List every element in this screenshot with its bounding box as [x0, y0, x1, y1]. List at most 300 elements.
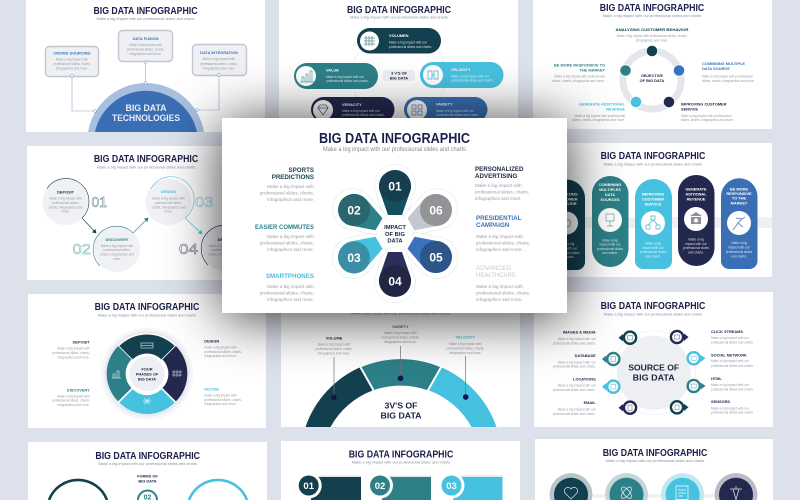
label: sensors: Make a big impact with our [711, 406, 750, 410]
panel: big data technologies [26, 0, 265, 132]
petal 03: 03 [347, 251, 361, 265]
subheading: Make a big impact with our professional slides and charts [350, 14, 448, 20]
pill: volumen: VOLUMEN [389, 33, 409, 38]
forms label [137, 474, 158, 484]
label: be more responsive: THE MARKET [579, 68, 606, 72]
pill: velocity: professional slides and charts. [451, 78, 494, 82]
callout: velocity: professional slides, charts, [447, 346, 484, 350]
label: discovery: DISCOVERY [67, 388, 90, 393]
step 03 design: more. [164, 210, 173, 214]
label: improving customer service [681, 102, 734, 122]
heading: BIG DATA INFOGRAPHIC [601, 151, 705, 162]
arch chart: 3V'S OF [384, 400, 418, 410]
step 03 design: DESIGN [161, 189, 176, 194]
pill: velocity [420, 62, 504, 88]
subheading: Make a big impact with our professional slides and charts [606, 458, 704, 463]
label: combining multiple data source: COMBINING MULTIPLE [702, 61, 745, 66]
step 04 decide: charts, infographics and [208, 252, 242, 256]
label: analyzing customer behavior: ANALYZING CUSTOMER BEHAVIOR [616, 27, 689, 32]
heading: BIG DATA INFOGRAPHIC [94, 154, 198, 165]
label: social network: professional slides and charts. [711, 364, 754, 368]
label: images and media: professional slides and charts. [553, 342, 596, 346]
subheading: Make a big impact with our professional slides and charts [98, 461, 197, 466]
label: advanced healthcare: professional slides, charts, [476, 290, 530, 296]
label: personalized advertising [475, 166, 529, 201]
pill: value: VALUE [326, 68, 339, 72]
petal 02 [332, 188, 387, 238]
label: analyzing customer behavior [616, 27, 689, 42]
heading: BIG DATA INFOGRAPHIC [347, 5, 451, 16]
petal 03 [332, 229, 387, 279]
label: html [711, 376, 754, 392]
label: sports predictions: infographics and more. [267, 197, 314, 202]
step 04 decide: 04 [179, 241, 198, 258]
pill: generate: impact with our [685, 242, 708, 246]
heading: BIG DATA INFOGRAPHIC [349, 450, 453, 461]
label: presidential campaign: professional slides, charts, [476, 240, 530, 246]
label: sensors: professional slides and charts. [711, 410, 754, 414]
label: smartphones: professional slides, charts, [260, 290, 314, 296]
step 03 design: 03 [195, 194, 214, 211]
subheading: Make a big impact with our professional slides and charts [604, 161, 702, 166]
card: data fusion: professional slides, charts, [127, 48, 164, 52]
label: smartphones: infographics and more. [267, 297, 314, 302]
pill: analyzing: Make a big [559, 242, 575, 246]
label: improving customer service: IMPROVING CUSTOMER [681, 102, 727, 106]
step 02 discovery: charts, infographics and [100, 252, 134, 256]
step 02 discovery: professional slides, [103, 248, 131, 252]
label: social network: SOCIAL NETWORK [711, 352, 747, 357]
ring: dark [49, 480, 107, 500]
pill: improving: and charts. [645, 254, 661, 258]
label: email: EMAIL [584, 400, 596, 405]
step 02 discovery: Make a big impact with [101, 244, 133, 248]
pill: generate: GENERATE [685, 187, 707, 192]
center label: 3 V'S OF [391, 70, 408, 76]
dome: TECHNOLOGIES [112, 113, 180, 123]
label: combining multiple data source [702, 61, 755, 83]
label: decide: professional slides, charts, [204, 398, 242, 402]
card: crowd sourcing: infographics and more. [56, 66, 88, 70]
pill: analyzing: ANALYZING [555, 192, 578, 197]
pill: generate: professional slides [683, 246, 710, 250]
badge 02 [138, 490, 157, 500]
callout: variety: infographics and more. [384, 340, 417, 344]
callout: volume: Make a big impact with [318, 342, 350, 346]
card: data fusion: Make a big impact with [129, 43, 162, 47]
label: advanced healthcare: ADVANCED [476, 265, 512, 272]
label: generate additional revenue: Make a big impact with professional [574, 114, 625, 118]
card: crowd sourcing: CROWD SOURCING [53, 50, 91, 56]
label: locations [553, 377, 597, 392]
label: images and media: Make a big impact with our [558, 337, 597, 341]
center band [585, 217, 772, 228]
flower chart [325, 164, 465, 303]
block 03 [438, 472, 502, 500]
label: improving customer service: slides, charts, infographics and more. [681, 118, 734, 122]
label: personalized advertising: infographics and more. [475, 196, 522, 201]
label: email: Make a big impact with our [558, 408, 597, 412]
pill: veracity: Make a big impact with our [342, 109, 381, 113]
label: generate additional revenue [572, 102, 626, 122]
pill: improving: SERVICE [644, 202, 662, 206]
petal 02: 02 [347, 203, 361, 217]
label: deposit: Make a big impact with [57, 347, 90, 351]
label: presidential campaign: CAMPAIGN [476, 222, 510, 229]
label: presidential campaign [476, 215, 530, 252]
label: click streams: professional slides and charts. [711, 340, 754, 344]
label: presidential campaign: Make a big impact with [476, 234, 523, 239]
subheading: Make a big impact with our professional slides and charts [603, 13, 701, 18]
ring chart [620, 45, 685, 109]
label: smartphones [260, 273, 314, 302]
pill: improving [635, 179, 672, 269]
card: crowd sourcing: Make a big impact with [56, 58, 88, 62]
panel: impact of big data (center slide) [222, 118, 567, 313]
pill: improving: Make a big [645, 242, 661, 246]
callout: variety: professional slides, charts, [382, 336, 419, 340]
block 03: 03 [446, 481, 457, 492]
label: social network [711, 352, 754, 368]
card: data integration: infographics and more. [203, 66, 235, 70]
step 01 deposit: 01 [92, 194, 107, 211]
label: analyzing customer behavior: Make a big impact with professional slides, charts, [617, 34, 688, 38]
connector lines [72, 62, 219, 111]
label: be more responsive: Make a big impact with professional [554, 74, 605, 78]
label: advanced healthcare: HEALTHCARE [476, 272, 516, 279]
subheading: Make a big impact with our professional slides and charts [604, 311, 702, 316]
arch chart: BIG DATA [380, 411, 422, 421]
label: html: Make a big impact with our [711, 383, 750, 387]
donut chart: BIG DATA [138, 376, 156, 381]
pill: be more responsive: RESPONSIVE [726, 191, 752, 196]
forms label: BIG DATA [138, 479, 157, 484]
label: improving customer service: Make a big impact with professional [681, 114, 732, 118]
pill: variety: Make a big impact with our [436, 109, 475, 113]
step 03 design: Make a big impact with [152, 196, 185, 200]
panel: 3V's arch [281, 292, 520, 427]
step 02 discovery: more. [113, 257, 121, 261]
pill: volumen: Make a big impact with our [389, 40, 428, 44]
pill: be more responsive: professional slides [726, 250, 753, 254]
step 01 deposit: professional slides, [52, 201, 79, 205]
card: data fusion [118, 30, 172, 62]
label: html: professional slides and charts. [711, 388, 754, 392]
label: database [553, 353, 597, 368]
subheading: Make a big impact with our professional slides and charts [96, 16, 194, 21]
step 04 decide: professional slides, [211, 248, 239, 252]
label: presidential campaign: infographics and more. [476, 247, 523, 252]
heading: BIG DATA INFOGRAPHIC [94, 6, 198, 17]
center label [383, 70, 415, 81]
card: data fusion: infographics and more. [129, 52, 162, 56]
connector band [571, 494, 736, 498]
pill: generate: ADITIONAL [685, 192, 707, 196]
label: deposit: infographics and more. [57, 356, 90, 360]
pill: veracity: professional slides and charts. [342, 113, 385, 117]
petal 06 [403, 188, 458, 238]
hub: OF BIG [385, 232, 405, 238]
callout: velocity: Make a big impact with [449, 342, 482, 346]
step 01 deposit: more. [61, 210, 70, 214]
dome [88, 83, 204, 132]
step 03 design [146, 177, 214, 234]
petal 05: 05 [429, 250, 443, 264]
connecting ring [354, 49, 444, 97]
panel: four steps process [27, 146, 222, 280]
label: click streams: Make a big impact with our [711, 336, 750, 340]
hub [378, 216, 412, 251]
pill: combining: professional slides [597, 247, 624, 251]
step 04 decide: Make a big impact with [209, 244, 241, 248]
card: crowd sourcing [46, 46, 98, 76]
pill: variety [404, 97, 488, 118]
label: decide: Make a big impact with [204, 394, 237, 398]
callout: volume: infographics and more. [318, 352, 350, 356]
panel: four phases of big data [28, 294, 266, 428]
callout: volume: professional slides, charts, [315, 347, 353, 351]
label: personalized advertising: ADVERTISING [475, 173, 517, 180]
pill: analyzing: professional slides [553, 251, 580, 255]
card: crowd sourcing: professional slides, charts, [53, 62, 91, 66]
label: analyzing customer behavior: infographics and more. [636, 38, 668, 42]
pill: combining [592, 176, 628, 267]
label: design [204, 339, 242, 358]
ring chart: OBJECTIVE [641, 73, 663, 78]
label: database: Make a big impact with our [558, 360, 597, 364]
pill: generate: Make a big [688, 238, 704, 242]
pill: value [294, 63, 378, 89]
pill: be more responsive [721, 178, 758, 269]
pill: combining: SOURCES [600, 197, 620, 202]
label: click streams: CLICK STREAMS [711, 329, 743, 334]
pill: generate: and charts. [688, 250, 704, 254]
label: be more responsive [552, 62, 606, 83]
donut chart: PHASES OF [136, 371, 159, 376]
forms label: FORMS OF [137, 474, 158, 479]
ring chart: OF BIG DATA [640, 78, 665, 83]
label: deposit: professional slides, charts, [52, 351, 90, 355]
label: design: DESIGN [204, 339, 219, 344]
label: combining multiple data source: slides, charts, infographics and more. [702, 79, 755, 83]
petal 05 [403, 229, 458, 279]
step 04 decide [179, 225, 222, 270]
source nodes [602, 330, 706, 415]
pill: analyzing: BEHAVIOR [556, 201, 577, 206]
center label: BIG DATA [390, 76, 408, 80]
petal halos [325, 164, 465, 303]
label: sports predictions: Make a big impact with [267, 184, 314, 189]
pill: combining: DATA [605, 192, 615, 197]
label: decide: DECIDE [204, 387, 219, 392]
label: design: professional slides, charts, [204, 350, 242, 354]
pill: be more responsive: and charts. [731, 254, 747, 258]
label: advanced healthcare: Make a big impact with [476, 284, 523, 289]
step 03 design: charts, infographics and [152, 206, 186, 210]
central circle: SOURCE OF [628, 363, 679, 372]
pill: analyzing [567, 180, 585, 270]
label: database: professional slides and charts. [553, 364, 596, 368]
block 01: 01 [303, 481, 315, 492]
pill: combining: MULTIPLES [599, 187, 621, 192]
label: generate additional revenue: slides, charts, infographics and more. [572, 118, 625, 122]
label: presidential campaign: PRESIDENTIAL [476, 215, 522, 222]
pill: improving: CUSTOMER [642, 196, 664, 202]
label: database: DATABASE [575, 353, 596, 358]
label: discovery: professional slides, charts, [52, 398, 90, 402]
panel: forms of big data [28, 442, 267, 500]
pill: be more responsive: Make a big [731, 241, 747, 245]
callout: variety [382, 324, 419, 381]
center slide shadow [222, 122, 567, 317]
label: sports predictions: PREDICTIONS [272, 174, 314, 181]
label: locations: professional slides and charts. [553, 388, 596, 392]
panel: 3 V's of big data pills [279, 0, 518, 125]
label: personalized advertising: Make a big impact with [475, 183, 522, 188]
pill: variety: VARIETY [436, 102, 453, 106]
heading: BIG DATA INFOGRAPHIC [601, 301, 705, 312]
callout: variety: VARIETY [392, 324, 409, 329]
card: data integration: professional slides, charts, [200, 62, 238, 66]
heading: BIG DATA INFOGRAPHIC [600, 3, 704, 14]
label: design: infographics and more. [204, 354, 237, 358]
label: social network: Make a big impact with our [711, 359, 750, 363]
label: decide: infographics and more. [204, 402, 237, 406]
petal 06: 06 [429, 203, 443, 217]
label: decide [204, 387, 242, 406]
pill: analyzing: CUSTOMER [555, 196, 578, 201]
pill: improving: IMPROVING [642, 192, 664, 197]
label: images and media [553, 330, 597, 346]
subheading: Make a big impact with our professional slides and charts [352, 459, 450, 464]
pill: velocity: VELOCITY [451, 67, 471, 72]
heading: BIG DATA INFOGRAPHIC [319, 131, 470, 147]
label: sports predictions [260, 167, 314, 202]
step 01 deposit [42, 179, 107, 233]
label: sports predictions: professional slides, charts, [260, 190, 314, 196]
pill: velocity: Make a big impact with our [451, 74, 490, 78]
label: easier commutes [255, 224, 314, 252]
label: be more responsive: BE MORE RESPONSIVE TO [554, 62, 605, 68]
label: combining multiple data source: DATA SOURCE [702, 66, 730, 71]
subheading: Make a big impact with our professional slides and charts [97, 164, 195, 170]
step 02 discovery: DISCOVERY [106, 237, 129, 242]
label: advanced healthcare [476, 265, 530, 302]
pill: analyzing: and charts. [559, 255, 574, 259]
label: discovery [52, 388, 90, 407]
label: deposit: DEPOSIT [73, 340, 90, 345]
step 01 deposit: Make a big impact with [49, 196, 82, 200]
pill: be more responsive: MARKET [731, 200, 748, 206]
label: personalized advertising: PERSONALIZED [475, 166, 524, 173]
heading: BIG DATA INFOGRAPHIC [95, 451, 200, 462]
pill: veracity: VERACITY [342, 102, 362, 107]
pill: veracity [311, 97, 394, 118]
subheading: Make a big impact with our professional slides and charts [98, 312, 196, 317]
callout: velocity: infographics and more. [449, 351, 482, 355]
label: click streams [711, 329, 754, 344]
label: email [553, 400, 597, 416]
label: easier commutes: infographics and more. [267, 247, 314, 252]
pill: combining: Make a big [602, 238, 618, 242]
label: smartphones: SMARTPHONES [266, 273, 314, 280]
label: discovery: infographics and more. [57, 403, 90, 407]
card: data integration [192, 44, 246, 76]
label: sports predictions: SPORTS [289, 167, 314, 174]
donut chart [101, 328, 193, 420]
pill: be more responsive: TO THE [732, 196, 746, 200]
hub: DATA [387, 238, 403, 244]
label: email: professional slides and charts. [553, 412, 596, 416]
label: images and media: IMAGES & MEDIA [563, 330, 596, 335]
pill: combining: and charts. [602, 251, 618, 255]
panel: source of big data [534, 292, 773, 427]
subheading: Make a big impact with our professional slides and charts [323, 147, 466, 153]
pill: be more responsive: impact with our [728, 246, 751, 250]
pill: volumen [357, 28, 441, 54]
label: easier commutes: professional slides, charts, [260, 240, 314, 246]
label: generate additional revenue: GENERATE ADDITIONAL [579, 102, 626, 106]
petal 01 [379, 170, 411, 215]
label: sensors: SENSORS [711, 399, 730, 404]
label: improving customer service: SERVICE [681, 106, 698, 112]
pill: improving: impact with our [642, 246, 665, 250]
callout: variety: Make a big impact with [384, 331, 417, 335]
heading: BIG DATA INFOGRAPHIC [603, 448, 707, 459]
central circle [612, 331, 696, 415]
pill: variety: professional slides and charts. [436, 113, 479, 117]
label: smartphones: Make a big impact with [267, 284, 314, 289]
pill: value: professional slides and charts. [326, 79, 369, 83]
pill: be more responsive: BE MORE [730, 186, 748, 191]
panel: numbered blocks [281, 441, 520, 500]
label: be more responsive: slides, charts, infographics and more. [552, 79, 605, 83]
pill: analyzing: impact with our [556, 246, 578, 250]
block 01 [296, 472, 361, 500]
callout: volume: VOLUME [326, 335, 343, 340]
pill: improving: professional slides [640, 250, 667, 254]
step 01 deposit: charts, infographics and [49, 206, 83, 210]
label: generate additional revenue: REVENUE [606, 106, 625, 112]
card: data integration: DATA INTEGRATION [200, 50, 238, 55]
label: personalized advertising: professional slides, charts, [475, 190, 529, 194]
callout: velocity: VELOCITY [456, 334, 475, 339]
step 04 decide: DECIDE [218, 237, 233, 242]
card: data fusion: DATA FUSION [133, 36, 159, 41]
panel: icon circles [535, 439, 773, 500]
panel: vertical pills [567, 143, 772, 277]
pill: generate [678, 175, 714, 266]
label: deposit [52, 340, 90, 360]
step 03 design: professional slides, [155, 201, 182, 205]
icon: tower [715, 473, 757, 500]
pill: combining: impact with our [599, 242, 622, 246]
pill: value: Make a big impact with our [326, 75, 365, 79]
central circle: BIG DATA [633, 374, 675, 383]
connector dots [71, 61, 220, 112]
label: design: Make a big impact with [204, 346, 237, 350]
icon: document [661, 473, 704, 500]
label: combining multiple data source: Make a big impact with professional [702, 74, 753, 78]
label: discovery: Make a big impact with [57, 394, 90, 398]
block 02: 02 [375, 481, 385, 492]
icon: atom [605, 473, 648, 500]
label: locations: Make a big impact with our [558, 384, 597, 388]
block 02 [367, 472, 431, 500]
petal 04 [379, 252, 411, 297]
label: html: HTML [711, 376, 722, 381]
step 01 deposit: DEPOSIT [57, 190, 75, 194]
